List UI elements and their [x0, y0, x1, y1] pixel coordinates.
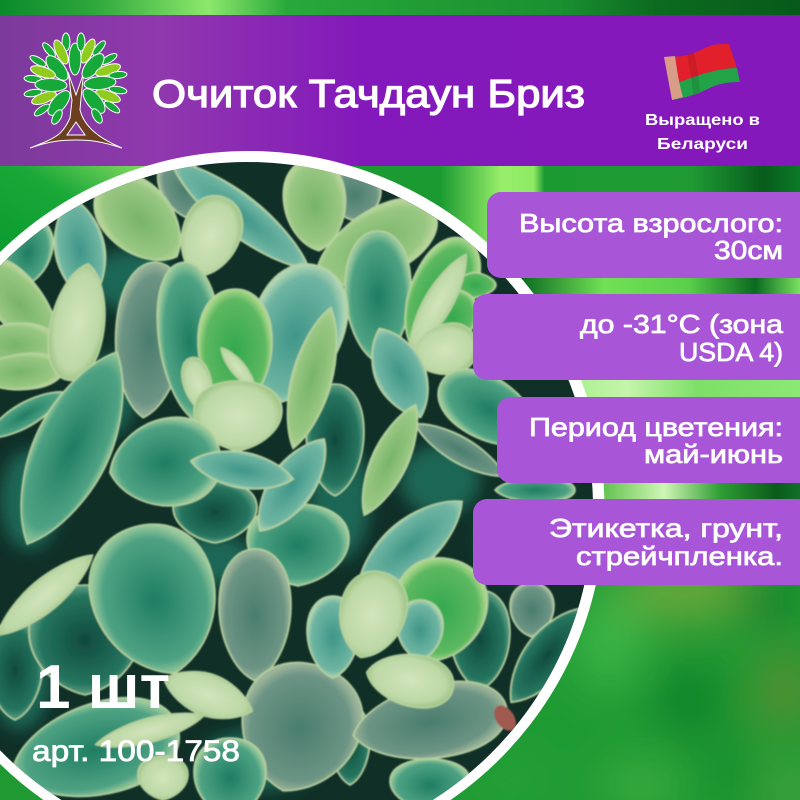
- panel: package contents: [473, 499, 800, 585]
- title: Очиток Тачдаун Бриз: [152, 73, 585, 116]
- panel: flowering period: [497, 397, 800, 483]
- logo: tree: [24, 33, 127, 148]
- round plant photo with white ring: [0, 145, 620, 800]
- panel: package contents: стрейчпленка.: [576, 541, 783, 571]
- panel: flowering period: май-июнь: [644, 439, 783, 469]
- panel: frost hardiness: до -31°C (зона: [580, 309, 784, 339]
- label: grown in Belarus: [645, 112, 760, 153]
- panel: flowering period: Период цветения:: [529, 412, 783, 442]
- quantity: 1 шт: [36, 653, 170, 722]
- white ring: [0, 151, 604, 800]
- panel: package contents: Этикетка, грунт,: [549, 513, 783, 543]
- panel: adult height: [487, 192, 800, 278]
- tree trunk: [30, 72, 122, 148]
- label: grown in Belarus: Беларуси: [657, 136, 748, 153]
- panel: frost hardiness: [473, 294, 800, 380]
- panel: adult height: 30см: [714, 235, 783, 265]
- article number: арт. 100-1758: [32, 735, 240, 768]
- panel: adult height: Высота взрослого:: [519, 208, 783, 238]
- label: grown in Belarus: Выращено в: [645, 112, 760, 129]
- top purple header band: [0, 15, 800, 166]
- icon: flag of Belarus: [664, 44, 740, 100]
- panel: frost hardiness: USDA 4): [679, 337, 783, 367]
- tree leaves: [24, 33, 127, 126]
- photo of leaves: [0, 145, 620, 800]
